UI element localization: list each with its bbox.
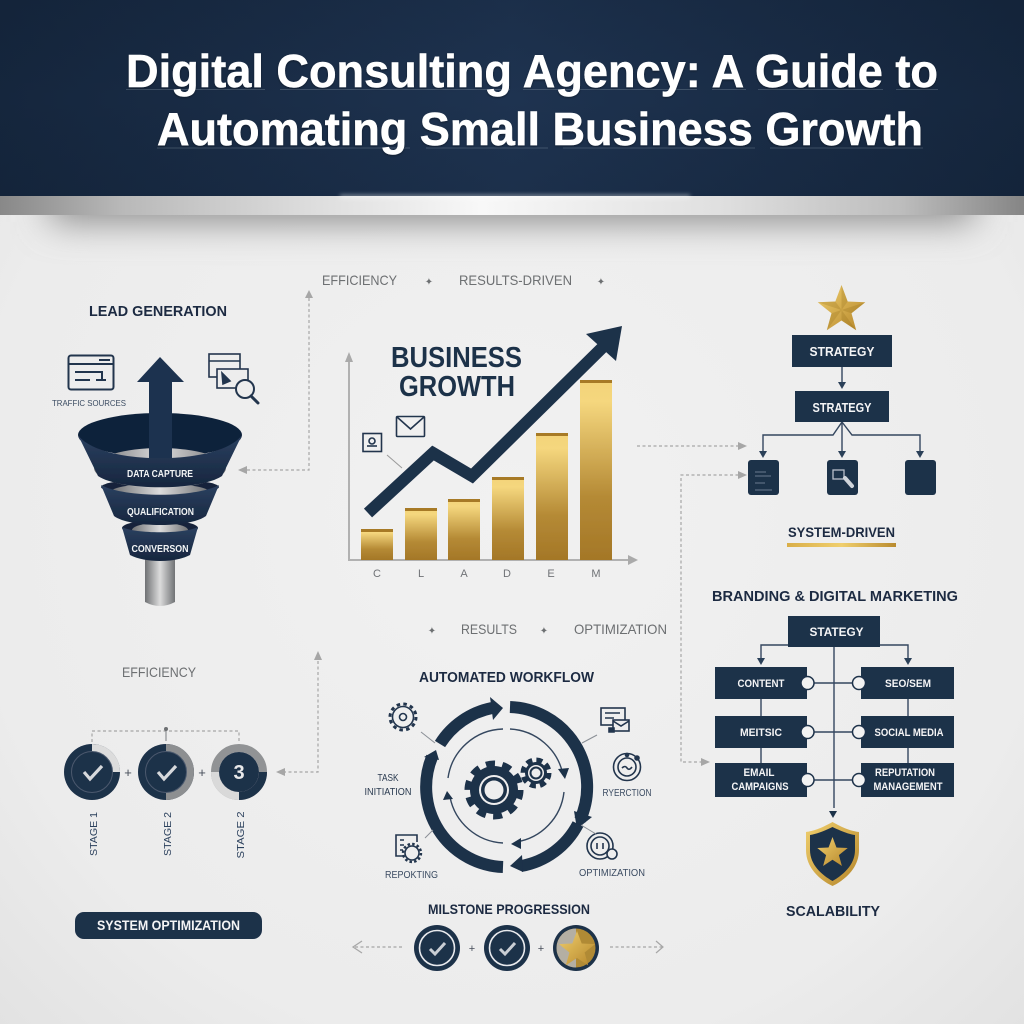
panel: business growth chart <box>345 326 638 580</box>
arrow: chart to funnel <box>238 290 313 474</box>
icon: gold star <box>818 285 865 330</box>
panel: system optimization stages <box>64 651 322 939</box>
box: social media: SOCIAL MEDIA <box>874 727 944 739</box>
panel: milestone progression <box>353 901 663 971</box>
milestone 1 <box>414 925 460 971</box>
box: seo/sem: SEO/SEM <box>885 678 931 690</box>
icon: report with gear <box>396 830 433 862</box>
axis labels <box>373 568 601 580</box>
keyword row: efficiency, results-driven: EFFICIENCY <box>322 272 398 288</box>
header shadow <box>50 170 974 222</box>
keyword row: efficiency, results-driven: RESULTS-DRIVEN <box>459 272 572 288</box>
stage labels <box>89 811 247 858</box>
funnel tier: qualification <box>101 479 219 525</box>
panel: lead generation <box>52 303 258 606</box>
stage 3 <box>215 748 263 796</box>
tile: touch screen <box>827 460 858 495</box>
icon: small badge <box>363 434 402 468</box>
icon: shield with star <box>806 822 859 886</box>
tile: blank <box>905 460 936 495</box>
up arrow through funnel <box>137 357 184 465</box>
funnel <box>78 357 242 606</box>
label: rejection: RYERCTION <box>602 788 652 799</box>
label: task initiation: TASK <box>378 772 398 784</box>
stage 2 <box>138 744 194 800</box>
tile: document <box>748 460 779 495</box>
title: Digital Consulting Agency: A Guide to <box>126 45 938 97</box>
box: email campaigns: EMAIL <box>744 767 775 779</box>
box: metric <box>715 716 807 748</box>
funnel tier: data capture <box>78 357 242 488</box>
milestone 2 <box>484 925 530 971</box>
funnel tier: conversion: CONVERSON <box>132 544 188 555</box>
box: strategy <box>788 616 880 647</box>
stage labels: STAGE 2 <box>236 811 247 858</box>
milestone 3: star <box>553 925 599 971</box>
keyword row: results, optimization: OPTIMIZATION <box>574 621 667 637</box>
funnel tier: qualification: QUALIFICATION <box>127 507 194 518</box>
heading: branding and digital marketing: BRANDING & DIGITAL MARKETING <box>712 588 958 605</box>
box: social media <box>861 716 954 748</box>
keyword row: results, optimization <box>428 621 667 637</box>
pill: system optimization <box>75 912 262 939</box>
arrows: chart to strategy tree <box>637 442 747 766</box>
icon: envelope <box>396 416 424 436</box>
icon: magnifier over windows <box>209 354 258 403</box>
keyword row: efficiency, results-driven: ✦ <box>597 277 605 288</box>
icon: central gears <box>468 760 549 816</box>
box: email campaigns: CAMPAIGNS <box>732 781 788 793</box>
box: content: CONTENT <box>738 678 785 690</box>
axis labels: C <box>373 568 381 580</box>
box: reputation management: MANAGEMENT <box>874 781 943 793</box>
stage 3: 3 <box>233 762 245 784</box>
heading: lead generation: LEAD GENERATION <box>89 303 227 320</box>
label: task initiation: INITIATION <box>364 786 412 798</box>
label: traffic sources: TRAFFIC SOURCES <box>52 398 126 408</box>
stage bracket <box>92 727 239 742</box>
funnel tier: conversion <box>122 520 198 561</box>
axis labels: L <box>418 568 424 580</box>
arrow: left dashed <box>353 941 404 953</box>
bars <box>361 380 612 560</box>
header banner <box>0 0 1024 215</box>
stage 1 <box>64 744 120 800</box>
keyword row: efficiency, results-driven: ✦ <box>425 277 433 288</box>
axis labels: E <box>547 568 555 580</box>
label: optimization: OPTIMIZATION <box>579 867 645 879</box>
stage labels: STAGE 1 <box>89 812 100 856</box>
strategy box 1: STRATEGY <box>810 344 875 359</box>
chart axes <box>345 352 638 565</box>
heading: business growth: GROWTH <box>399 371 515 403</box>
box: strategy: STATEGY <box>810 625 864 639</box>
panel: strategy tree <box>748 285 936 547</box>
box: content <box>715 667 807 699</box>
heading: business growth <box>391 342 522 403</box>
label: efficiency: EFFICIENCY <box>122 664 197 680</box>
box: metric: MEITSIC <box>740 727 782 739</box>
panel: branding and digital marketing <box>712 588 958 920</box>
heading: milestone progression: MILSTONE PROGRESSION <box>428 901 590 917</box>
axis labels: D <box>503 568 511 580</box>
icon: optimization dial <box>581 825 617 859</box>
label: scalability: SCALABILITY <box>786 904 880 920</box>
label: task initiation <box>364 772 412 798</box>
keyword row: results, optimization: ✦ <box>540 626 548 637</box>
box: reputation management <box>861 763 954 797</box>
connector plus: + <box>469 943 475 955</box>
keyword row: results, optimization: ✦ <box>428 626 436 637</box>
label: system-driven: SYSTEM-DRIVEN <box>788 524 895 540</box>
keyword row: efficiency, results-driven <box>322 272 605 288</box>
strategy box 1 <box>792 335 892 367</box>
strategy connectors <box>759 367 924 458</box>
growth arrow <box>368 326 622 513</box>
arrow: right dashed <box>610 941 663 953</box>
connector nodes <box>801 676 866 786</box>
connectors <box>757 645 912 818</box>
funnel tier: data capture: DATA CAPTURE <box>127 469 193 480</box>
icon: browser window <box>68 356 114 390</box>
arrow: stages to top <box>276 651 322 776</box>
axis labels: M <box>591 568 601 580</box>
connector plus: + <box>538 943 544 955</box>
strategy box 2 <box>795 391 889 422</box>
box: seo/sem <box>861 667 954 699</box>
connector plus: + <box>198 765 206 780</box>
inner cycle ring <box>443 729 569 849</box>
label: reporting: REPOKTING <box>385 869 438 881</box>
box: email campaigns <box>715 763 807 797</box>
title <box>126 45 938 155</box>
axis labels: A <box>460 568 468 580</box>
funnel spout <box>145 558 175 606</box>
box: reputation management: REPUTATION <box>875 767 935 779</box>
icon: rejection target <box>614 754 640 780</box>
icon: settings gear <box>390 704 435 743</box>
stage labels: STAGE 2 <box>163 812 174 856</box>
pill: system optimization: SYSTEM OPTIMIZATION <box>97 918 240 933</box>
title: Automating Small Business Growth <box>157 103 923 155</box>
icon: document with mail <box>582 708 629 743</box>
gold underline <box>787 543 896 547</box>
panel: automated workflow <box>364 670 652 881</box>
heading: automated workflow: AUTOMATED WORKFLOW <box>419 670 594 686</box>
outer cycle ring <box>424 697 592 872</box>
keyword row: results, optimization: RESULTS <box>461 621 517 637</box>
strategy box 2: STRATEGY <box>812 400 872 415</box>
connector plus: + <box>124 765 132 780</box>
heading: business growth: BUSINESS <box>391 342 522 374</box>
